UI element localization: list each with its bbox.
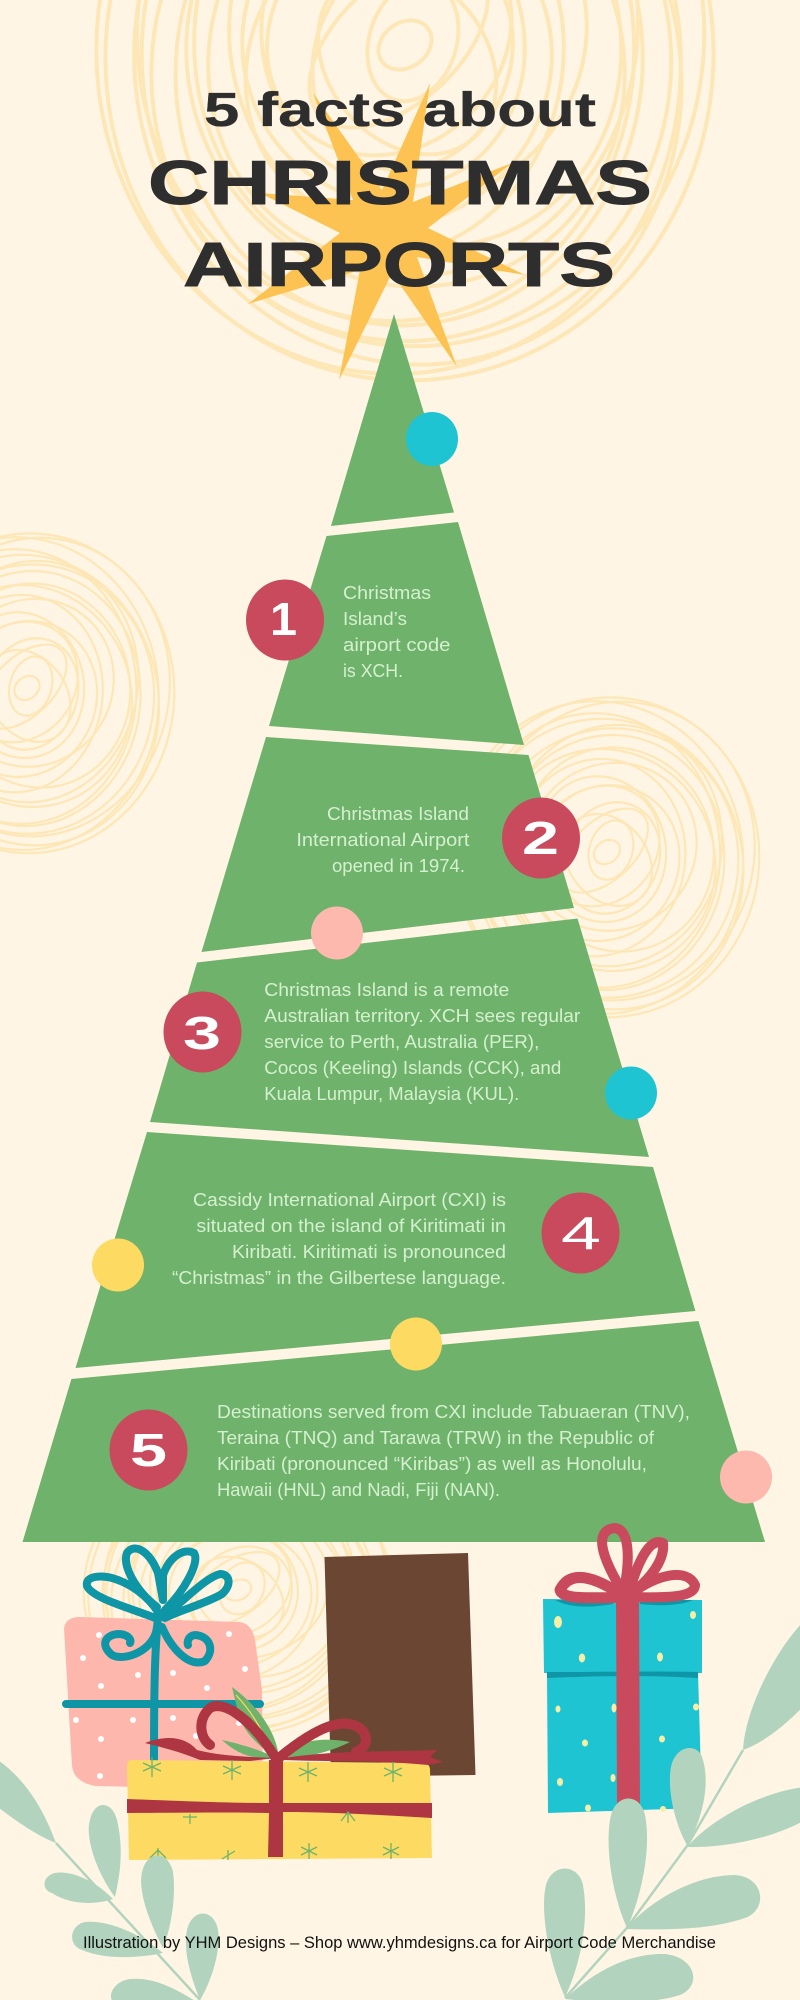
fact 3	[164, 979, 580, 1104]
number badge 4	[542, 1192, 620, 1274]
fact 5 text: Teraina (TNQ) and Tarawa (TRW) in the Republic of	[217, 1427, 655, 1448]
fact 1 text: airport code	[343, 634, 450, 655]
fact 1	[246, 580, 450, 681]
fact 1 text: is XCH.	[343, 660, 403, 681]
fact 5 text: Destinations served from CXI include Tabuaeran (TNV),	[217, 1401, 690, 1422]
fact 1 text: Christmas	[343, 582, 431, 603]
number badge 5	[110, 1410, 188, 1490]
fact 3 text: Kuala Lumpur, Malaysia (KUL).	[264, 1083, 519, 1104]
fact 4	[172, 1189, 620, 1288]
foliage: right branch	[544, 1620, 800, 2000]
number badge 1: 1	[270, 593, 297, 645]
number badge 4: 4	[561, 1207, 601, 1259]
fact 3 text: service to Perth, Australia (PER),	[264, 1031, 539, 1052]
number badge 1	[246, 580, 324, 660]
fact 3 text: Cocos (Keeling) Islands (CCK), and	[264, 1057, 561, 1078]
fact 5	[110, 1401, 690, 1500]
gift: cyan with red bow	[543, 1528, 702, 1813]
small green stars on wrapping	[143, 1757, 402, 1860]
scribble: right	[421, 654, 800, 1061]
footer credit: Illustration by YHM Designs – Shop www.yhmdesigns.ca for Airport Code Merchandise	[83, 1934, 716, 1952]
fact 4 text: Kiribati. Kiritimati is pronounced	[232, 1241, 506, 1262]
fact 3 text: Christmas Island is a remote	[264, 979, 509, 1000]
fact 3 text	[264, 979, 580, 1104]
fact 3 text: Australian territory. XCH sees regular	[264, 1005, 580, 1026]
fact 2 text: International Airport	[296, 829, 469, 850]
number badge 5: 5	[130, 1424, 167, 1476]
fact 2	[296, 798, 580, 878]
number badge 3	[164, 992, 242, 1072]
title line: 5 facts about: 5 facts about	[204, 84, 596, 137]
title line: CHRISTMAS: CHRISTMAS	[148, 149, 652, 218]
ornaments	[92, 412, 772, 1504]
christmas tree	[22, 314, 765, 1542]
holly leaves	[222, 1687, 350, 1758]
star tree topper	[248, 83, 525, 380]
title line: AIRPORTS: AIRPORTS	[183, 231, 615, 300]
number badge 2: 2	[522, 812, 559, 864]
fact 1 text: Island’s	[343, 608, 407, 629]
scribble: left	[0, 490, 215, 897]
fact 5 text	[217, 1401, 690, 1500]
fact 2 text: opened in 1974.	[332, 855, 465, 876]
title	[148, 84, 652, 300]
fact 5 text: Kiribati (pronounced “Kiribas”) as well as Honolulu,	[217, 1453, 647, 1474]
gift: yellow with red bow	[127, 1687, 443, 1860]
foliage: left branch	[0, 1758, 219, 2000]
fact 4 text: “Christmas” in the Gilbertese language.	[172, 1267, 506, 1288]
fact 4 text	[172, 1189, 506, 1288]
scribble: top	[29, 0, 799, 470]
fact 2 text: Christmas Island	[327, 803, 469, 824]
fact 4 text: Cassidy International Airport (CXI) is	[193, 1189, 506, 1210]
fact 1 text	[343, 582, 450, 681]
number badge 2	[502, 798, 580, 878]
tree trunk	[324, 1553, 476, 1777]
scribble: behind gifts	[50, 1417, 435, 1773]
number badge 3: 3	[183, 1007, 221, 1059]
fact 4 text: situated on the island of Kiritimati in	[196, 1215, 506, 1236]
gift: pink with teal bow	[64, 1548, 263, 1790]
fact 5 text: Hawaii (HNL) and Nadi, Fiji (NAN).	[217, 1479, 500, 1500]
fact 2 text	[296, 803, 469, 876]
